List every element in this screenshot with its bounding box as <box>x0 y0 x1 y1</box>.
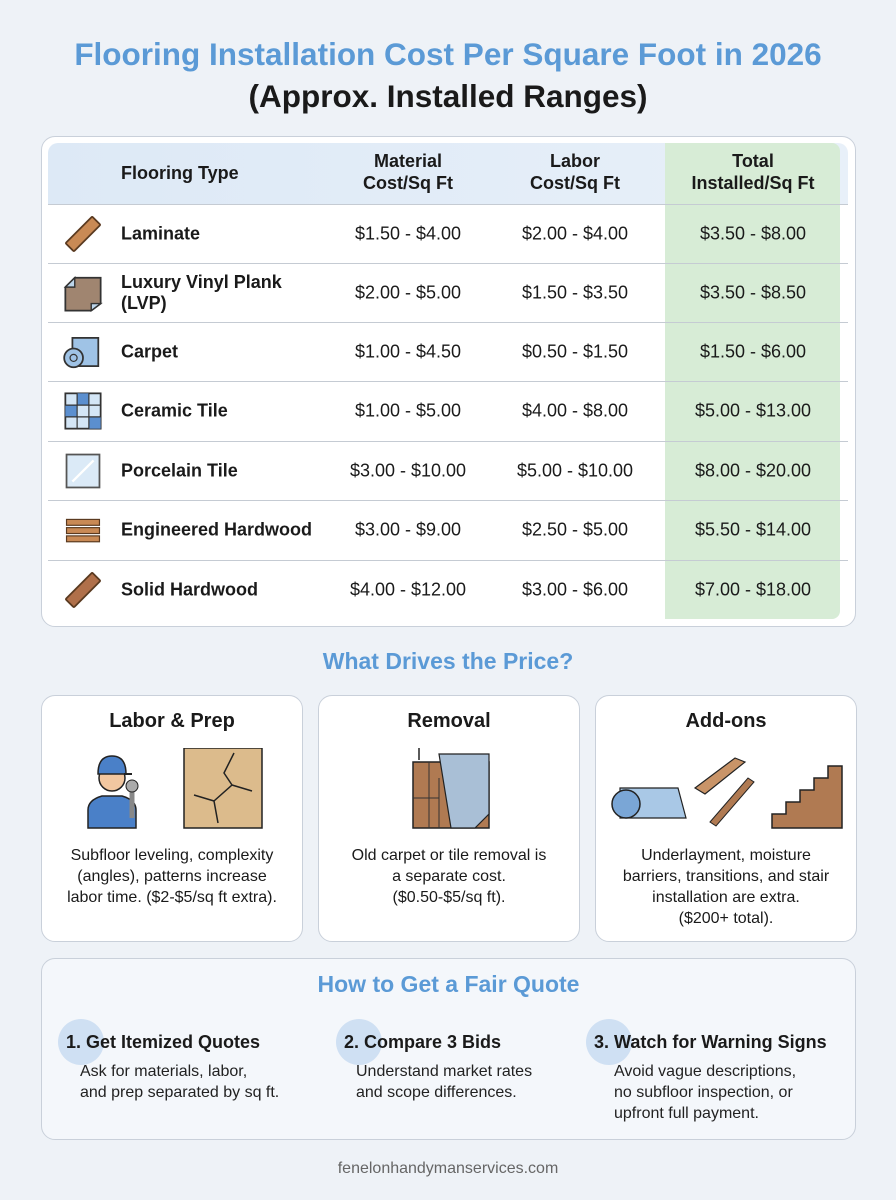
icon: carpet roll <box>63 337 100 368</box>
row: carpet <box>63 337 806 368</box>
row: porcelain tile: Porcelain Tile <box>121 460 238 480</box>
icon: removed flooring <box>412 748 490 829</box>
panel: removal: Removal <box>407 710 491 732</box>
icon: underlayment, trim, stairs <box>611 757 843 829</box>
subtitle: (Approx. Installed Ranges) <box>248 78 648 114</box>
row: engineered hardwood: $2.50 - $5.00 <box>522 519 628 539</box>
panel: cost table <box>41 136 856 627</box>
panel: add-ons: barriers, transitions, and stair <box>623 868 829 885</box>
row: solid hardwood: $4.00 - $12.00 <box>350 579 466 599</box>
row: carpet: $0.50 - $1.50 <box>522 341 628 361</box>
table header: Cost/Sq Ft <box>363 173 453 193</box>
row: carpet: Carpet <box>121 341 178 361</box>
panel: removal: Old carpet or tile removal is <box>352 847 546 864</box>
row: engineered hardwood: $3.00 - $9.00 <box>355 519 461 539</box>
row: LVP <box>64 272 806 313</box>
icon: stacked planks <box>66 518 100 542</box>
panel: labor & prep <box>41 695 303 942</box>
row: LVP: (LVP) <box>121 292 167 312</box>
row: LVP: Luxury Vinyl Plank <box>121 272 282 292</box>
table header: Cost/Sq Ft <box>530 173 620 193</box>
row: porcelain tile: $5.00 - $10.00 <box>517 460 633 480</box>
row: porcelain tile <box>66 454 811 488</box>
row: porcelain tile: $8.00 - $20.00 <box>695 460 811 480</box>
step 2 <box>336 1019 532 1101</box>
row: ceramic tile: $4.00 - $8.00 <box>522 400 628 420</box>
row: ceramic tile: $1.00 - $5.00 <box>355 400 461 420</box>
heading: fair quote: How to Get a Fair Quote <box>318 971 579 997</box>
text: upfront full payment. <box>614 1105 759 1122</box>
heading: what drives the price: What Drives the Price? <box>323 648 573 674</box>
table header <box>121 151 814 193</box>
row: LVP: $1.50 - $3.50 <box>522 282 628 302</box>
row: solid hardwood: $7.00 - $18.00 <box>695 579 811 599</box>
text: and scope differences. <box>356 1084 517 1101</box>
row: ceramic tile <box>64 392 811 430</box>
step 2: 2. Compare 3 Bids <box>344 1032 501 1052</box>
row: carpet: $1.00 - $4.50 <box>355 341 461 361</box>
row: laminate <box>65 216 806 252</box>
panel: add-ons: Underlayment, moisture <box>641 847 811 864</box>
total column highlight <box>665 143 840 619</box>
step 1: 1. Get Itemized Quotes <box>66 1032 260 1052</box>
row: engineered hardwood <box>66 518 811 542</box>
table header: Total <box>732 151 774 171</box>
step 3: 3. Watch for Warning Signs <box>594 1032 827 1052</box>
row: ceramic tile: Ceramic Tile <box>121 400 228 420</box>
row: ceramic tile: $5.00 - $13.00 <box>695 400 811 420</box>
step 2: Understand market rates <box>356 1063 532 1080</box>
icon: laminate plank <box>65 216 101 252</box>
row: solid hardwood <box>65 572 811 608</box>
table header: Material <box>374 151 442 171</box>
panel: how to get a fair quote <box>41 958 856 1140</box>
row: laminate: $3.50 - $8.00 <box>700 223 806 243</box>
step 3 <box>586 1019 827 1122</box>
panel: removal <box>318 695 580 942</box>
icon: ceramic tile grid <box>64 392 102 430</box>
footer: fenelonhandymanservices.com <box>338 1160 558 1177</box>
table header: Labor <box>550 151 600 171</box>
text: and prep separated by sq ft. <box>80 1084 279 1101</box>
icon: porcelain tile <box>66 454 100 488</box>
panel: add-ons: Add-ons <box>685 710 767 732</box>
row: laminate: Laminate <box>121 223 200 243</box>
panel: labor & prep: Labor & Prep <box>109 710 235 732</box>
step 3: Avoid vague descriptions, <box>614 1063 796 1080</box>
step 1 <box>58 1019 279 1101</box>
panel: add-ons: ($200+ total). <box>679 910 773 927</box>
panel: labor & prep: Subfloor leveling, complexity <box>71 847 273 864</box>
icon: hardwood plank <box>65 572 101 608</box>
row: LVP: $2.00 - $5.00 <box>355 282 461 302</box>
panel: removal: a separate cost. <box>392 868 506 885</box>
step 1: Ask for materials, labor, <box>80 1063 247 1080</box>
row: engineered hardwood: Engineered Hardwood <box>121 519 312 539</box>
row: LVP: $3.50 - $8.50 <box>700 282 806 302</box>
panel: labor & prep: labor time. ($2-$5/sq ft extra). <box>67 889 277 906</box>
icon: vinyl plank <box>64 276 103 312</box>
table header: Installed/Sq Ft <box>691 173 814 193</box>
table header: Flooring Type <box>121 163 239 183</box>
step 3: no subfloor inspection, or <box>614 1084 793 1101</box>
row: laminate: $1.50 - $4.00 <box>355 223 461 243</box>
icon: worker and cracked subfloor <box>87 748 263 829</box>
title: Flooring Installation Cost Per Square Foot in 2026 <box>74 36 822 72</box>
row: laminate: $2.00 - $4.00 <box>522 223 628 243</box>
row: carpet: $1.50 - $6.00 <box>700 341 806 361</box>
row: porcelain tile: $3.00 - $10.00 <box>350 460 466 480</box>
panel: removal: ($0.50-$5/sq ft). <box>393 889 505 906</box>
panel: labor & prep: (angles), patterns increase <box>77 868 267 885</box>
panel: add-ons: installation are extra. <box>652 889 800 906</box>
row: solid hardwood: $3.00 - $6.00 <box>522 579 628 599</box>
panel: add-ons <box>595 695 857 942</box>
table header band <box>48 143 848 204</box>
row: solid hardwood: Solid Hardwood <box>121 579 258 599</box>
row: engineered hardwood: $5.50 - $14.00 <box>695 519 811 539</box>
